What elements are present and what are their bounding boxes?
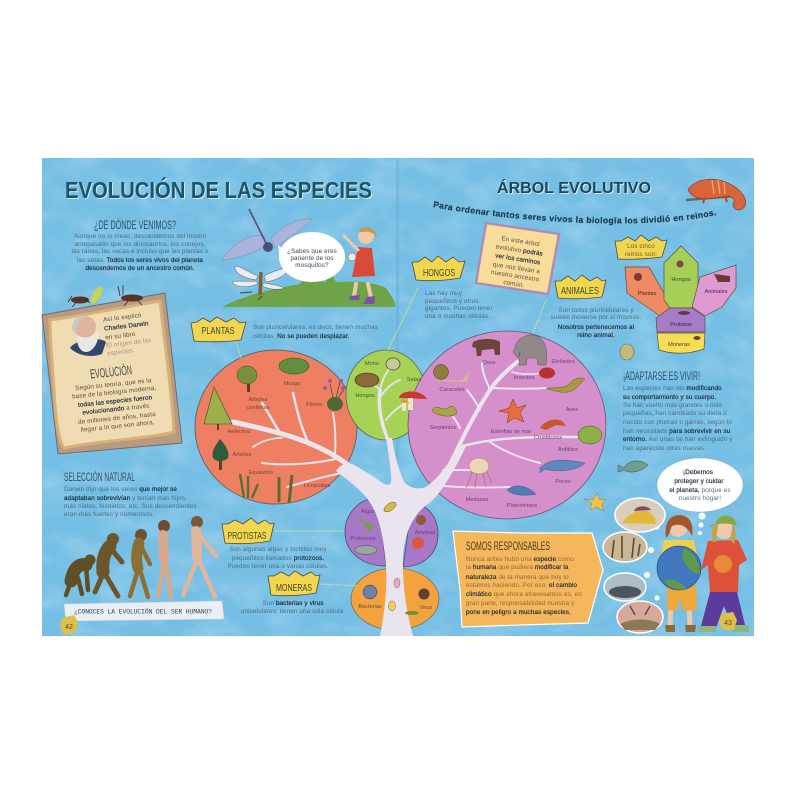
icon: frog	[578, 426, 602, 444]
text block: de dónde venimos: las setas. Todos los seres vivos del planeta	[77, 257, 203, 264]
icon: snake	[432, 406, 456, 416]
icon: Darwin portrait	[70, 316, 106, 356]
title: Evolución de las especies: EVOLUCIÓN DE LAS ESPECIES	[65, 176, 372, 203]
crown label: Plantas: PLANTAS	[202, 326, 235, 337]
icon: crustacean	[540, 420, 566, 430]
tree trunk and branches	[233, 362, 577, 636]
text: plantas description: Son pluricelulares, es decir, tienen muchas	[253, 324, 378, 331]
labels: Insectos	[514, 375, 535, 381]
text block: selección natural: eran más fuertes y numerosos.	[64, 511, 154, 518]
icon: conifer tree	[237, 366, 257, 392]
text: animales description: Son todos pluricelulares y	[558, 307, 634, 314]
leaves on trunk	[382, 500, 419, 615]
text: Charles Darwin caption	[103, 311, 153, 357]
text: Charles Darwin caption: Así lo explicó	[103, 312, 142, 324]
icon: chameleon	[686, 179, 746, 210]
text block: adaptarse es vivir	[623, 369, 733, 452]
branches: plantas	[233, 393, 352, 487]
icons and labels: protistas and moneras circles	[350, 500, 435, 615]
vignette: pollution	[604, 573, 646, 601]
labels: Crustáceos	[534, 435, 562, 441]
figure 2	[95, 533, 122, 596]
illustration: human evolution figures	[66, 516, 216, 597]
head	[669, 519, 687, 537]
panel: somos responsables: estamos haciendo. Por eso, el cambio	[466, 582, 577, 589]
icon: fish	[618, 461, 648, 472]
labels: Bacterias	[358, 604, 382, 610]
note card: ver los caminos	[495, 252, 541, 267]
text: Charles Darwin caption: Charles Darwin	[104, 320, 149, 333]
text: Charles Darwin caption: El origen de las	[106, 337, 152, 349]
icon: bear	[472, 339, 500, 356]
icon: lycopods	[279, 475, 292, 503]
text block: adaptarse es vivir: su comportamiento y su cuerpo.	[623, 394, 716, 401]
text block: selección natural: Darwin dijo que los seres que mejor se	[64, 486, 177, 493]
crown: los cinco reinos: Los cinco	[627, 243, 655, 250]
text: moneras description: Son bacterias y virus	[263, 600, 323, 607]
icons and labels: hongos circle	[355, 358, 427, 411]
text block: de dónde venimos: Aunque no lo creas, descendemos del mismo	[74, 233, 207, 240]
petal: hongos: Hongos	[671, 277, 691, 283]
parchment scroll	[50, 301, 174, 448]
labels	[355, 361, 421, 399]
icon: fish	[540, 460, 585, 473]
icon: yellow star	[584, 493, 606, 511]
text block: adaptarse es vivir: han aparecido otras nuevas.	[623, 445, 706, 452]
petal: protistas: Protistas	[670, 322, 692, 328]
connectors from crowns to circles	[236, 288, 546, 586]
text: Evolución	[69, 360, 160, 434]
panel: somos responsables: climático que ahora atravesamos es, en	[466, 591, 582, 598]
labels: Estrellas de mar	[491, 429, 531, 435]
text block: adaptarse es vivir: Las especies han ido modificando	[623, 385, 722, 392]
icon: hongos shelf	[355, 373, 379, 387]
page background	[42, 158, 754, 636]
labels: Serpientes	[430, 425, 457, 431]
panel: somos responsables: SOMOS RESPONSABLES	[466, 539, 550, 553]
text block: adaptarse es vivir: pequeñas, han cambiado su dieta o	[623, 410, 727, 417]
labels: Virus	[420, 605, 433, 611]
labels: Osos	[482, 360, 496, 366]
panel: somos responsables	[453, 531, 603, 627]
panel: tree circles	[195, 331, 606, 630]
legs	[701, 592, 745, 628]
page number 43	[719, 612, 737, 630]
thought dots	[644, 512, 706, 600]
globe	[657, 546, 701, 590]
labels	[430, 359, 578, 509]
icon: fern tree	[204, 387, 232, 430]
note card	[476, 223, 559, 294]
text block: de dónde venimos: antepasado que los dinosaurios, los conejos,	[75, 241, 206, 248]
text: plantas description: células. No se pueden desplazar.	[253, 333, 350, 340]
labels: Aves	[566, 407, 578, 413]
panel: somos responsables: la humana que pudiera modificar la	[466, 564, 569, 571]
icon: ameba 2	[412, 537, 424, 549]
panel: somos responsables: Nunca antes hubo una especie como	[466, 556, 574, 563]
labels: Árboles	[233, 451, 252, 458]
labels: Platelmintos	[507, 503, 537, 509]
vignette: burnt trees	[603, 532, 647, 562]
figure 3	[130, 529, 150, 597]
crown: los cinco reinos	[615, 235, 667, 259]
circle: animales	[408, 331, 606, 519]
crown: los cinco reinos: reinos son:	[625, 251, 657, 258]
vignette: dry land	[617, 601, 663, 633]
icon: bacteria	[363, 585, 377, 599]
text: protistas description: Pueden tener una o varias células.	[227, 563, 329, 570]
vignette: car with luggage	[615, 498, 665, 532]
shirt	[660, 540, 698, 560]
illustration: dragonflies, grass and girl	[222, 209, 396, 307]
dragonfly	[222, 209, 312, 260]
icon: moho	[386, 358, 400, 370]
crown label: Protistas	[222, 518, 274, 544]
text: Evolución: de millones de años, hasta	[78, 411, 156, 426]
icon: protozoo	[355, 546, 377, 554]
text: Charles Darwin caption: en su libro	[105, 331, 136, 342]
text: Charles Darwin caption: especies.	[107, 347, 135, 357]
labels: Caracoles	[439, 387, 465, 393]
icons and labels: animales circle	[430, 335, 602, 509]
heading: Árbol evolutivo: ÁRBOL EVOLUTIVO	[498, 179, 652, 198]
petal: plantas: Plantas	[638, 291, 657, 297]
labels: Amebas	[415, 530, 435, 536]
icon: snail	[434, 364, 470, 382]
crown label: Hongos: HONGOS	[423, 268, 455, 279]
text: hongos description: gigantes. Pueden tener	[425, 305, 493, 312]
speech bubble: pariente de los	[290, 255, 334, 262]
banner: conoces la evolución	[64, 601, 224, 621]
ants and leaf on the card	[68, 285, 143, 307]
text: protistas description: pequeñitos llamados protozoos.	[232, 555, 324, 562]
figure 5	[183, 516, 216, 597]
text: moneras description	[241, 600, 345, 615]
text: hongos description: Las hay muy	[425, 290, 463, 297]
text block: de dónde venimos: las ranas, las vacas e incluso que las plantas o	[71, 248, 209, 255]
branches: hongos	[367, 366, 410, 440]
crown label: Animales: ANIMALES	[561, 286, 599, 297]
banner: conoces la evolución: ¿CONOCES LA EVOLUCIÓN DEL SER HUMANO?	[74, 608, 212, 616]
labels: Flores	[306, 402, 322, 408]
labels: Musgo	[284, 381, 300, 387]
icon: elephant	[513, 335, 547, 365]
sandals and legs	[670, 600, 690, 628]
panel: somos responsables: pone en peligro a muchas especies.	[466, 609, 571, 616]
icon: flatworm	[507, 486, 536, 495]
crown label: Plantas	[191, 317, 246, 342]
text block: adaptarse es vivir: han necesitado para sobrevivir en su	[623, 428, 731, 435]
text: moneras description: unicelulares: tienen una sola célula.	[241, 608, 345, 615]
page number 42: 42	[65, 624, 73, 631]
text block: de dónde venimos	[71, 217, 209, 272]
icon: ladybug	[539, 368, 555, 378]
circle: protistas	[345, 498, 438, 567]
petal: moneras: Moneras	[668, 342, 690, 348]
speech bubble	[278, 232, 345, 282]
head and cap	[715, 521, 733, 539]
labels: Peces	[555, 479, 571, 485]
text: animales description: Nosotros pertenecemos al	[558, 324, 634, 331]
icon: starfish	[499, 399, 526, 423]
grass	[222, 272, 396, 307]
icon: ameba 1	[416, 515, 426, 525]
page number 43: 43	[724, 620, 732, 627]
labels: coníferas	[246, 405, 270, 411]
icon: deciduous tree	[212, 439, 229, 470]
figure 4	[158, 520, 171, 597]
text block: adaptarse es vivir: nacido con plumas o garras, según lo	[623, 419, 732, 426]
text: Evolución: base de la biología moderna,	[72, 385, 157, 401]
text block: adaptarse es vivir: ¡ADAPTARSE ES VIVIR!	[623, 369, 700, 383]
text: Evolución: evolucionando a través	[82, 403, 150, 417]
thought bubble: proteger el planeta	[657, 458, 743, 512]
icon: moss	[279, 358, 309, 374]
circle: moneras	[351, 568, 439, 630]
red shirt	[701, 540, 747, 592]
text: Evolución: Según su teoría, que es la	[75, 377, 152, 392]
labels: Árboles	[249, 396, 268, 403]
text: Evolución: todas las especies fueron	[78, 394, 153, 409]
petal: animales: Animales	[704, 289, 728, 295]
note card: que nos llevan a	[492, 261, 541, 276]
note card: En este árbol	[501, 235, 540, 248]
icon: setas	[399, 391, 427, 411]
circle: plantas	[195, 350, 357, 504]
figure 1	[66, 554, 96, 595]
crown label: Moneras: MONERAS	[276, 583, 312, 594]
crown label: Moneras	[268, 571, 320, 596]
text: hongos description	[425, 290, 493, 320]
page number 42	[60, 615, 78, 635]
labels: Equisetos	[249, 470, 273, 476]
text block: selección natural: adaptaban sobrevivían y tenían más hijos,	[64, 495, 187, 502]
text: animales description	[551, 307, 641, 339]
note card: evolutivo podrás	[495, 243, 543, 258]
text block: de dónde venimos: descendemos de un ancestro común.	[86, 265, 195, 272]
labels: Licopodios	[304, 483, 331, 489]
heading: Árbol evolutivo: ÁRBOL EVOLUTIVO	[497, 178, 651, 197]
subtitle on curve: Para ordenar tantos seres vivos la biología los dividió en reinos.	[433, 201, 716, 226]
text block: adaptarse es vivir: entorno. Así unas se han extinguido y	[623, 436, 733, 443]
icon: small snail creature	[620, 344, 634, 360]
thought bubble: proteger el planeta: el planeta, porque es	[669, 487, 731, 494]
thought bubble: proteger el planeta: proteger y cuidar	[674, 478, 724, 485]
icon: alga	[355, 516, 375, 532]
panel: Darwin parchment card	[42, 285, 182, 454]
text: protistas description: Son algunas algas y bichitos muy	[229, 546, 327, 553]
labels: Algas	[361, 509, 375, 515]
labels: Helechos	[227, 429, 251, 435]
thought bubble: proteger el planeta: nuestro hogar!	[679, 495, 721, 502]
text: animales description: reino animal.	[577, 332, 615, 339]
note card: común.	[503, 279, 525, 289]
crown label: Hongos	[412, 256, 465, 281]
labels	[350, 509, 435, 611]
icon: flowers	[323, 379, 345, 411]
text block: selección natural: más nietos, bisnietos, etc. Sus descendientes	[64, 503, 197, 510]
thought bubble: proteger el planeta: ¡Debemos	[683, 469, 713, 476]
icons and labels: plantas circle	[204, 358, 345, 503]
speech bubble: mosquitos?	[295, 262, 329, 269]
labels: Protozoos	[350, 536, 376, 542]
icon: horsetails	[240, 474, 258, 498]
text: hongos description: una o muchas células.	[425, 313, 490, 320]
panel: somos responsables: naturaleza de la manera que hoy lo	[466, 574, 569, 581]
text: animales description: suelen moverse por sí mismos.	[551, 314, 641, 321]
pants	[667, 585, 697, 611]
illustration: man with cap	[698, 516, 750, 632]
text: Evolución: EVOLUCIÓN	[89, 362, 133, 382]
icon: bird	[546, 378, 585, 392]
text: protistas description	[227, 546, 329, 570]
text block: adaptarse es vivir: Se han vuelto más grandes o más	[623, 402, 722, 409]
girl	[344, 227, 377, 304]
text: Evolución: llegar a lo que son ahora.	[81, 419, 155, 434]
labels: Medusas	[466, 497, 489, 503]
labels: Elefantes	[551, 359, 575, 365]
labels	[227, 381, 331, 489]
crown label: Protistas: PROTISTAS	[228, 531, 267, 542]
branches: animales	[433, 362, 577, 488]
illustration: woman with globe	[657, 515, 701, 632]
panel: somos responsables: gran parte, responsabilidad nuestra y	[466, 600, 575, 607]
icon: virus	[418, 588, 430, 600]
labels: Hongos	[355, 393, 375, 399]
speech bubble: ¿Sabes que eres	[287, 248, 337, 255]
text block: selección natural	[64, 469, 197, 518]
text: hongos description: pequeñitos y otros	[425, 298, 479, 305]
note card: nuestro ancestro	[490, 269, 540, 284]
text: plantas description	[253, 324, 378, 340]
diagram: five kingdoms	[615, 235, 736, 353]
labels: Anfibios	[558, 447, 578, 453]
circle: hongos	[346, 350, 426, 440]
labels: Setas	[407, 377, 421, 383]
crown label: Animales	[555, 275, 606, 299]
text block: selección natural: SELECCIÓN NATURAL	[64, 469, 135, 484]
title: Evolución de las especies: EVOLUCIÓN DE LAS ESPECIES	[66, 177, 373, 204]
labels: Moho	[365, 361, 379, 367]
text block: de dónde venimos: ¿DE DÓNDE VENIMOS?	[94, 217, 176, 232]
second insect	[232, 266, 288, 300]
icon: jellyfish	[466, 458, 492, 488]
